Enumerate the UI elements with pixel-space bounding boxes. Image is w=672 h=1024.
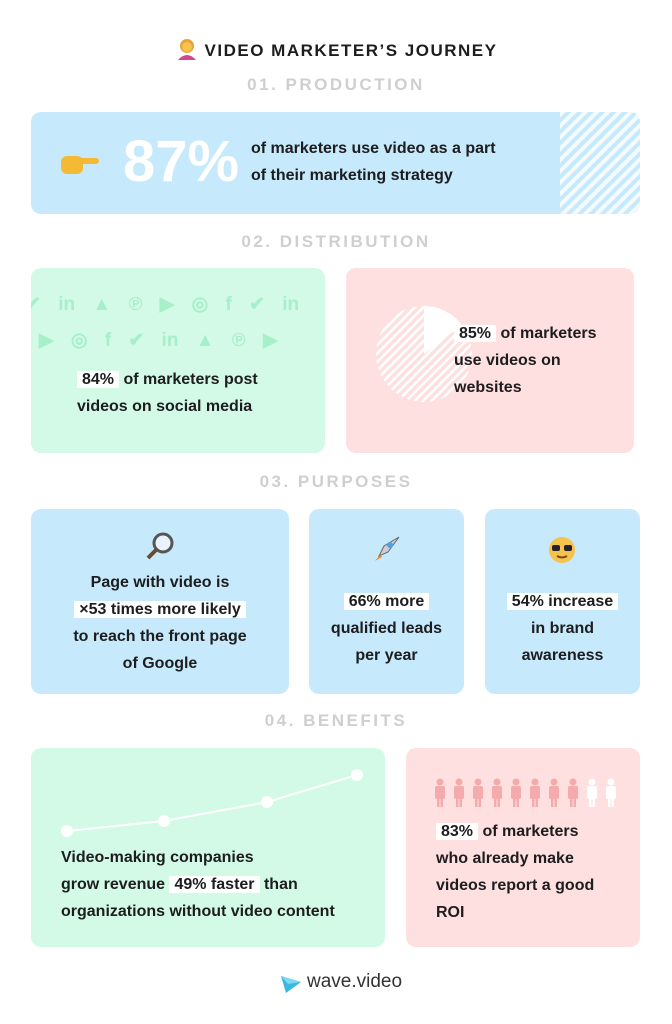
- text: organizations without video content: [61, 903, 335, 920]
- heading: benefits: 04. BENEFITS: [265, 711, 407, 730]
- text: of their marketing strategy: [251, 167, 453, 184]
- text: ROI: [436, 904, 464, 921]
- icon: magnifier: [146, 532, 174, 560]
- people icons: [435, 778, 616, 807]
- panel: websites: [346, 268, 634, 453]
- text: 66% more: [349, 593, 424, 610]
- panel: revenue: [31, 748, 385, 947]
- heading: production: 01. PRODUCTION: [247, 75, 425, 94]
- icon: sunglasses emoji: [549, 537, 575, 563]
- text: websites: [454, 379, 522, 396]
- logo text: wave.video: [307, 971, 402, 992]
- text: Page with video is: [91, 574, 229, 591]
- text: use videos on: [454, 352, 561, 369]
- text: videos on social media: [77, 398, 252, 415]
- social icons: [31, 294, 299, 351]
- text: ×53 times more likely: [79, 601, 241, 618]
- panel: social media: [31, 268, 325, 453]
- icon: pointing hand: [61, 156, 99, 174]
- text: [73, 574, 247, 672]
- text: in brand: [531, 620, 594, 637]
- text: [436, 823, 594, 921]
- heading: purposes: 03. PURPOSES: [260, 472, 412, 491]
- panel: awareness: [485, 509, 640, 694]
- panel: ROI: [406, 748, 640, 947]
- title: VIDEO MARKETER’S JOURNEY: [205, 41, 497, 60]
- text: who already make: [436, 850, 574, 867]
- text: 84% of marketers post: [82, 371, 258, 388]
- icon: logo triangle: [281, 976, 301, 993]
- text: qualified leads: [331, 620, 442, 637]
- text: 83% of marketers: [441, 823, 579, 840]
- text: videos report a good: [436, 877, 594, 894]
- social icons: ▶ ◎ f ✔ in ▲ ℗ ▶: [39, 330, 278, 351]
- text: 54% increase: [512, 593, 613, 610]
- hatched area: [560, 112, 640, 214]
- text: [331, 593, 442, 664]
- panel: google: [31, 509, 289, 694]
- text: [507, 593, 618, 664]
- logo: [281, 971, 402, 993]
- panel: leads: [309, 509, 464, 694]
- text: to reach the front page: [73, 628, 247, 645]
- text: Video-making companies: [61, 849, 254, 866]
- icon: rocket: [375, 536, 400, 561]
- big stat 87%: 87%: [123, 129, 239, 194]
- line chart: [61, 769, 363, 837]
- social icons: ✔ in ▲ ℗ ▶ ◎ f ✔ in: [31, 294, 299, 315]
- pie chart: [376, 306, 472, 402]
- text: per year: [355, 647, 418, 664]
- text: [251, 140, 496, 184]
- text: [454, 325, 597, 396]
- text: awareness: [522, 647, 603, 664]
- heading: distribution: 02. DISTRIBUTION: [241, 232, 431, 251]
- text: [77, 371, 258, 415]
- text: of Google: [123, 655, 197, 672]
- panel: production: [31, 112, 640, 214]
- text: grow revenue 49% faster than: [61, 876, 298, 893]
- text: of marketers use video as a part: [251, 140, 496, 157]
- text: 85% of marketers: [459, 325, 597, 342]
- icon: person emoji: [178, 39, 196, 60]
- text: [61, 849, 335, 920]
